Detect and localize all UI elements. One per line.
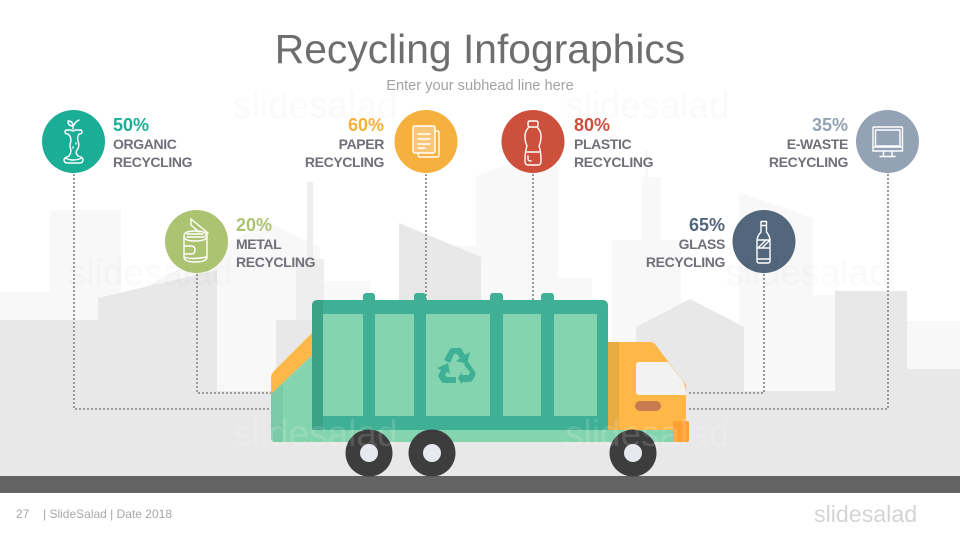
road xyxy=(0,476,960,493)
item: paper recycling xyxy=(305,110,458,173)
icon: computer monitor xyxy=(856,110,919,173)
percent: 35% xyxy=(812,115,848,135)
watermarks xyxy=(68,85,890,454)
truck cab xyxy=(608,342,686,430)
city skyline background xyxy=(0,150,960,476)
watermarks: slidesalad xyxy=(233,413,398,454)
truck container xyxy=(363,293,375,305)
percent: 65% xyxy=(689,215,725,235)
subhead: Enter your subhead line here xyxy=(386,78,574,94)
icon: tin can xyxy=(165,210,228,273)
label: RECYCLING xyxy=(113,154,193,170)
label: RECYCLING xyxy=(646,254,725,270)
truck hopper xyxy=(271,355,312,442)
label: PLASTIC xyxy=(574,136,632,152)
footer page text: | SlideSalad | Date 2018 xyxy=(43,507,172,521)
item: metal recycling xyxy=(165,210,316,273)
label: RECYCLING xyxy=(236,254,316,270)
percent: 20% xyxy=(236,215,272,235)
label: METAL xyxy=(236,236,282,252)
icon: documents xyxy=(394,110,458,173)
label: RECYCLING xyxy=(305,154,384,170)
percent: 80% xyxy=(574,115,610,135)
item: glass recycling xyxy=(646,210,796,273)
label: GLASS xyxy=(679,236,725,252)
percent: 50% xyxy=(113,115,149,135)
watermarks: slidesalad xyxy=(565,413,730,454)
item: plastic recycling xyxy=(502,110,654,173)
connector lines xyxy=(74,174,888,409)
label: RECYCLING xyxy=(574,154,654,170)
title: Recycling Infographics xyxy=(275,26,685,72)
item: e-waste recycling xyxy=(769,110,919,173)
label: RECYCLING xyxy=(769,154,848,170)
footer logo: slidesalad xyxy=(814,501,917,527)
icon: plastic bottle xyxy=(502,110,564,173)
icon: apple core xyxy=(42,110,105,173)
label: ORGANIC xyxy=(113,136,177,152)
recycle symbol xyxy=(437,348,476,385)
percent: 60% xyxy=(348,115,384,135)
item: organic recycling xyxy=(42,110,193,173)
label: E-WASTE xyxy=(787,136,848,152)
wheels xyxy=(346,430,656,476)
label: PAPER xyxy=(339,136,384,152)
garbage truck xyxy=(271,293,689,476)
truck bed strip xyxy=(312,430,682,442)
footer page text: 27 xyxy=(16,507,29,521)
icon: glass bottle xyxy=(732,210,796,273)
